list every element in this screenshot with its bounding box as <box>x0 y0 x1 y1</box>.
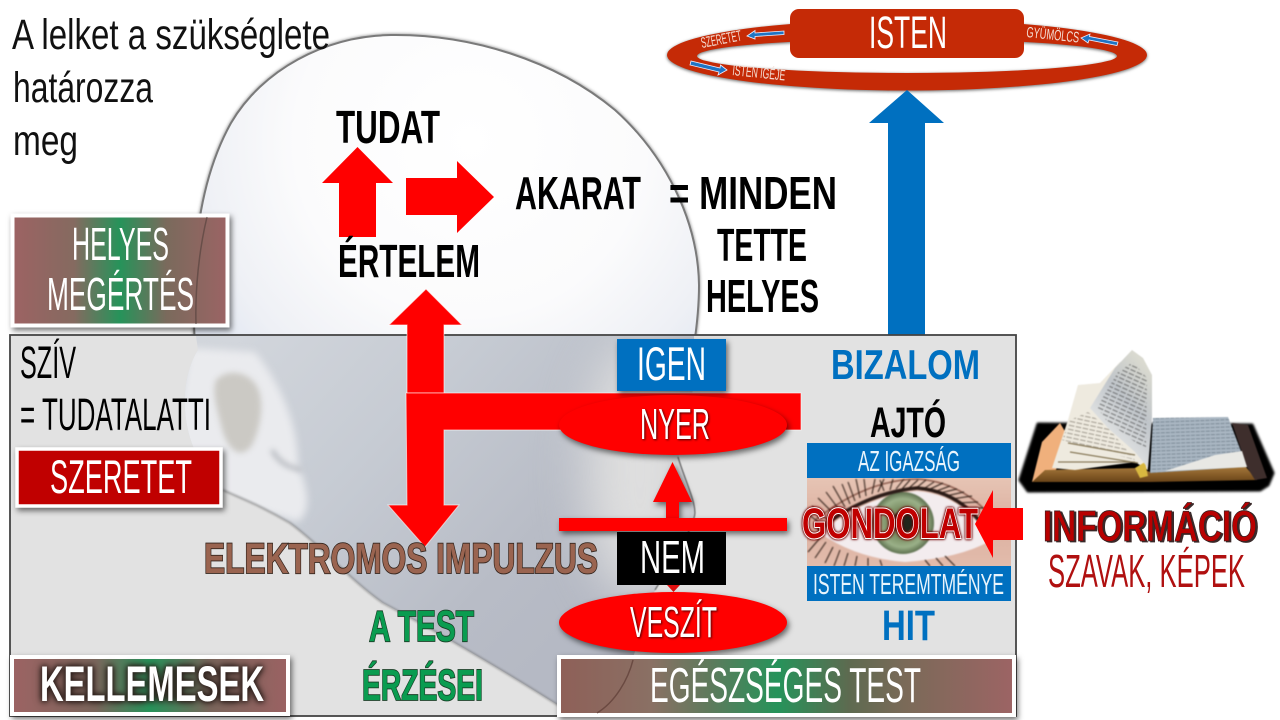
ring label: szeretet: SZERETET <box>700 27 743 52</box>
panel: helyes megértés: MEGÉRTÉS <box>47 268 194 320</box>
small arrow gyümölcs <box>1081 34 1118 46</box>
red arrow T-shape down to elektromos impulzus <box>388 393 801 547</box>
VESZÍT ellipse <box>559 592 787 653</box>
small arrow left <box>747 30 784 39</box>
statement: minden tette helyes: = MINDEN <box>669 167 837 219</box>
eyelashes <box>808 479 984 566</box>
small arrow isten igéje <box>690 61 727 75</box>
turned page <box>1090 350 1152 468</box>
back pages <box>1052 362 1148 470</box>
statement: minden tette helyes: TETTE <box>717 219 807 271</box>
right edge of cover <box>1232 423 1267 480</box>
panel: helyes megértés <box>12 216 228 326</box>
label: a test érzései: A TEST <box>369 602 474 651</box>
label: a test érzései <box>362 602 483 710</box>
panel: szív (subconscious) box <box>10 335 1016 716</box>
bottom page block <box>1032 466 1257 482</box>
panel: szeretet: SZERETET <box>50 450 192 503</box>
ISTEN box: ISTEN <box>869 7 947 58</box>
NYER ellipse: NYER <box>640 400 710 449</box>
neck and jaw <box>185 336 695 716</box>
arrow: értelem to akarat <box>406 161 494 233</box>
blue arrow up to ISTEN <box>869 90 944 336</box>
small red arrow up to nyer <box>653 462 692 518</box>
panel: egészséges test: EGÉSZSÉGES TEST <box>650 659 921 713</box>
label: ajtó: AJTÓ <box>870 398 946 447</box>
red arrow up to értelem <box>389 289 462 393</box>
ring <box>667 20 1147 91</box>
arrow: értelem to tudat <box>322 147 393 237</box>
label ÉRTELEM: ÉRTELEM <box>338 235 480 287</box>
icon: open bible <box>1020 350 1273 491</box>
ISTEN box <box>790 7 1024 58</box>
statement: minden tette helyes: HELYES <box>706 270 819 322</box>
label: szív: SZÍV <box>20 337 76 388</box>
ear inner <box>214 373 261 453</box>
label AKARAT: AKARAT <box>515 167 641 219</box>
page bookmark <box>1135 462 1148 478</box>
book cover <box>1020 424 1273 491</box>
right page <box>1150 417 1247 473</box>
title: határozza <box>13 64 153 112</box>
small red tip under NEM <box>667 585 680 592</box>
ring with ISTEN <box>667 7 1147 91</box>
title: A lelket a szükséglete <box>12 11 330 59</box>
blue band: az igazság: AZ IGAZSÁG <box>858 445 960 478</box>
face shading <box>585 340 695 600</box>
panel: kellemesek <box>12 656 288 714</box>
ring label: isten igéje: ISTEN IGÉJE <box>732 62 786 85</box>
red divider bar <box>559 518 787 531</box>
IGEN box: IGEN <box>637 337 706 390</box>
ear rim <box>175 348 307 522</box>
title: meg <box>13 117 78 165</box>
label: a test érzései: ÉRZÉSEI <box>362 660 483 710</box>
neck edge shadow <box>223 490 575 716</box>
peach page edge <box>1032 423 1070 482</box>
label TUDAT: TUDAT <box>336 101 440 153</box>
NEM box: NEM <box>640 531 705 583</box>
ring label: gyümölcs: GYÜMÖLCS <box>1026 23 1080 47</box>
NEM box <box>617 531 726 585</box>
eye photo <box>807 478 1011 566</box>
red arrow from információ to gondolat <box>975 490 1023 558</box>
NYER ellipse <box>559 395 787 455</box>
statement: minden tette helyes <box>669 167 837 322</box>
head illustration: upper part <box>194 35 699 345</box>
head illustration: lower part in the box <box>175 336 695 716</box>
panel: helyes megértés: HELYES <box>72 218 169 270</box>
panel: szeretet <box>17 449 221 506</box>
label: elektromos impulzus: ELEKTROMOS IMPULZUS <box>204 535 598 583</box>
panel: kellemesek: KELLEMESEK <box>40 656 264 712</box>
eye panel <box>800 443 1020 601</box>
VESZÍT ellipse: VESZÍT <box>630 598 717 647</box>
IGEN box <box>617 337 726 391</box>
ear fold <box>272 450 302 470</box>
blue band: az igazság <box>807 443 1011 478</box>
panel: egészséges test <box>559 657 1014 715</box>
label: bizalom: BIZALOM <box>831 341 980 388</box>
blue band: isten teremtménye <box>807 566 1011 601</box>
blue band: isten teremtménye: ISTEN TEREMTMÉNYE <box>813 568 1004 601</box>
label: hit: HIT <box>882 602 935 650</box>
title <box>12 11 330 165</box>
label: gondolat: GONDOLAT <box>802 500 978 548</box>
label: tudatalatti: = TUDATALATTI <box>20 389 211 440</box>
jaw edge <box>655 457 695 590</box>
